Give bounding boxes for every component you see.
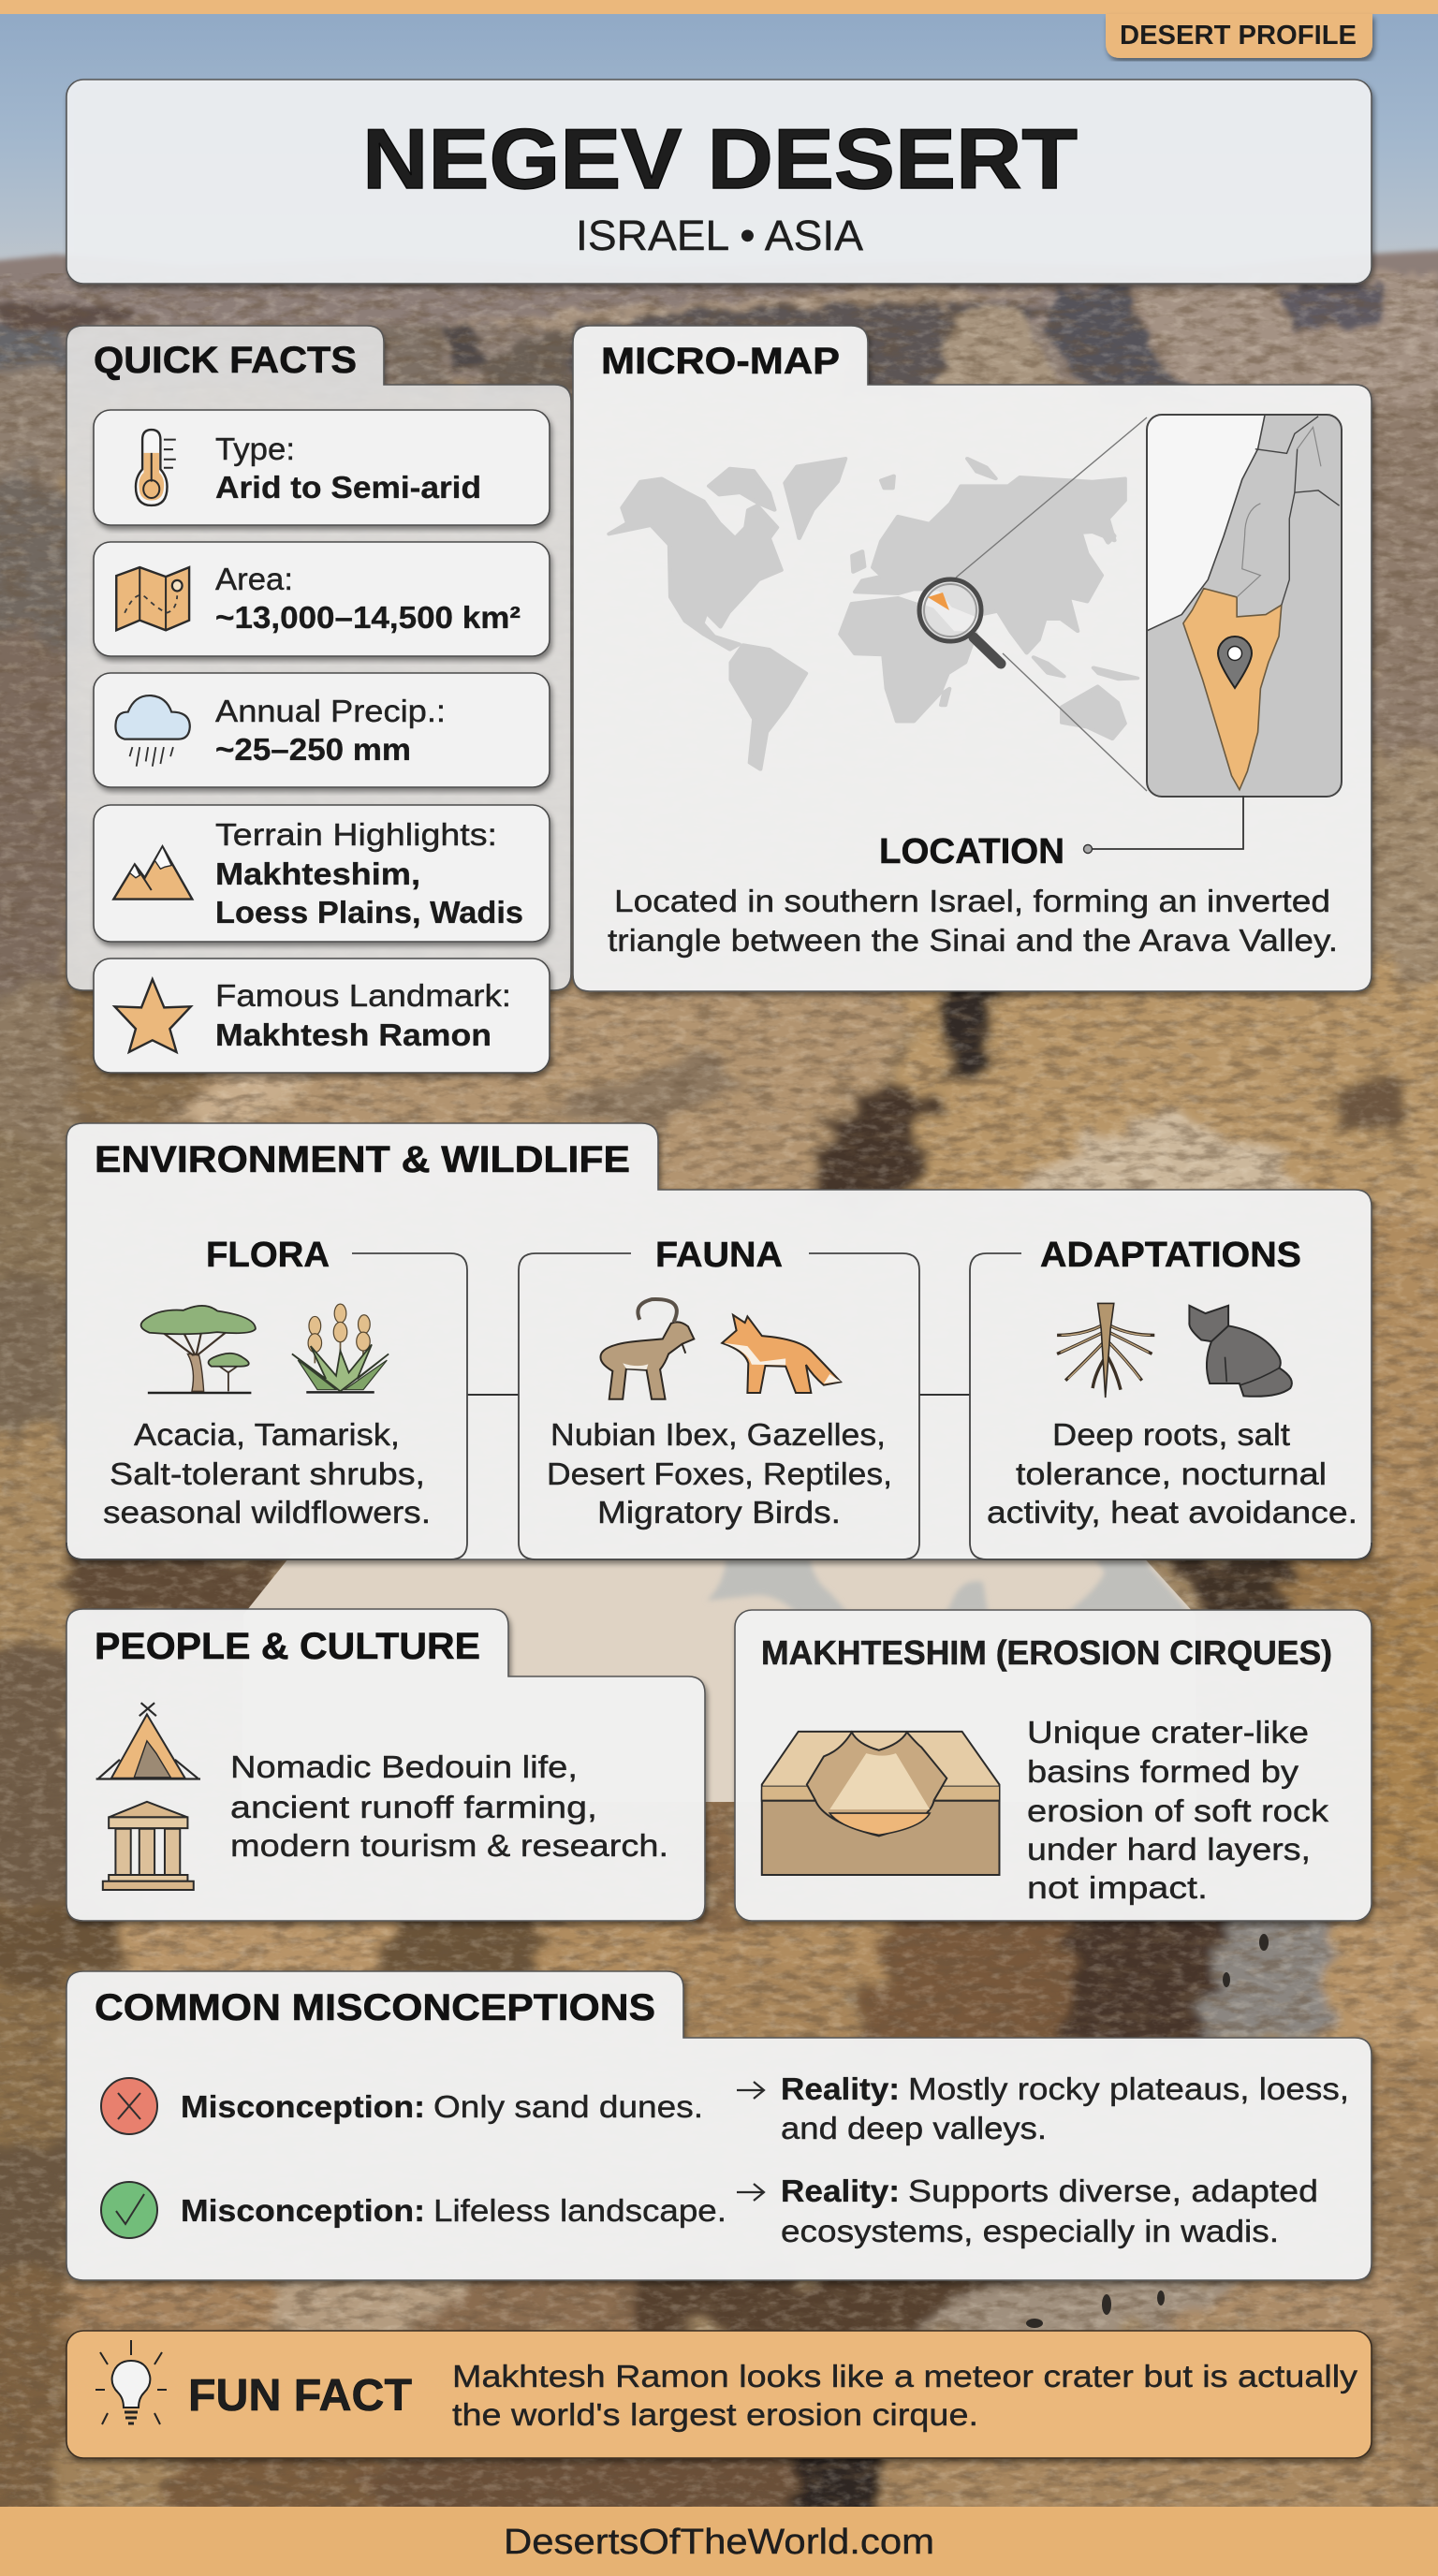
icon: desert fox <box>722 1315 841 1393</box>
fact: area: Area: <box>215 562 293 596</box>
heading: makhteshim: MAKHTESHIM (EROSION CIRQUES) <box>761 1633 1332 1672</box>
arrow one <box>737 2082 764 2099</box>
flora text: Salt-tolerant shrubs, <box>110 1456 425 1491</box>
fauna text <box>547 1417 892 1530</box>
heading: people and culture: PEOPLE & CULTURE <box>95 1626 480 1667</box>
flora text: seasonal wildflowers. <box>103 1495 431 1530</box>
heading: environment and wildlife: ENVIRONMENT & WILDLIFE <box>95 1139 630 1180</box>
icon: thermometer <box>136 430 176 505</box>
icon: magnifying glass <box>919 579 1001 664</box>
adaptations text: tolerance, nocturnal <box>1016 1456 1327 1491</box>
adaptations text <box>987 1417 1357 1530</box>
fact: famous landmark <box>94 959 550 1073</box>
fact: terrain highlights: Loess Plains, Wadis <box>215 895 523 929</box>
fun fact text: the world's largest erosion cirque. <box>452 2397 978 2432</box>
misconception two: Misconception: <box>181 2193 425 2228</box>
reality two: ecosystems, especially in wadis. <box>781 2214 1279 2248</box>
people text: ancient runoff farming, <box>230 1790 597 1824</box>
world map <box>609 459 1137 769</box>
icon: nubian ibex <box>600 1299 694 1399</box>
misconception one <box>181 2089 703 2124</box>
misconception two: Lifeless landscape. <box>433 2193 726 2228</box>
adaptations text: activity, heat avoidance. <box>987 1495 1357 1530</box>
fact: area <box>94 542 550 656</box>
connectors between cards <box>467 1394 970 1396</box>
fauna text: Desert Foxes, Reptiles, <box>547 1456 892 1491</box>
icon: mountains <box>113 846 192 900</box>
inset map: negev <box>1139 405 1342 797</box>
adaptations heading: ADAPTATIONS <box>1040 1236 1301 1275</box>
icon: deep roots <box>1057 1303 1154 1398</box>
icon: star <box>114 979 191 1052</box>
people text <box>230 1749 668 1863</box>
icon: green check <box>101 2182 157 2238</box>
adaptations text: Deep roots, salt <box>1052 1417 1290 1452</box>
reality one: Mostly rocky plateaus, loess, <box>908 2071 1349 2106</box>
heading: micro-map: MICRO-MAP <box>601 341 840 382</box>
icon: red cross <box>101 2078 157 2134</box>
flora heading: FLORA <box>206 1236 330 1275</box>
icon: nocturnal fox <box>1189 1306 1292 1397</box>
footer bar <box>0 2507 1438 2576</box>
fact: annual precipitation <box>94 673 550 787</box>
fun fact text: Makhtesh Ramon looks like a meteor crater but is actually <box>452 2359 1358 2393</box>
fun fact text <box>452 2359 1358 2432</box>
location description: triangle between the Sinai and the Arava Valley. <box>608 923 1338 958</box>
footer text: DesertsOfTheWorld.com <box>504 2523 934 2562</box>
icon: ancient temple <box>103 1802 194 1890</box>
icon: acacia trees <box>141 1306 256 1393</box>
fact: type: Type: <box>215 432 295 466</box>
location description <box>608 884 1338 958</box>
reality one: Reality: <box>781 2071 900 2106</box>
zoom connector lines <box>956 417 1147 791</box>
panel: environment and wildlife <box>66 1123 1372 1559</box>
icon: map <box>116 567 189 630</box>
people text: Nomadic Bedouin life, <box>230 1749 578 1784</box>
reality one: and deep valleys. <box>781 2111 1047 2145</box>
makhteshim text: basins formed by <box>1027 1754 1299 1789</box>
icon: light bulb <box>95 2340 167 2424</box>
makhteshim text: Unique crater-like <box>1027 1715 1309 1749</box>
fact: annual precipitation: ~25–250 mm <box>215 732 411 767</box>
fact: famous landmark: Makhtesh Ramon <box>215 1017 492 1052</box>
fact: area: ~13,000–14,500 km² <box>215 600 521 635</box>
fun fact label: FUN FACT <box>188 2371 412 2421</box>
flora text: Acacia, Tamarisk, <box>134 1417 400 1452</box>
tag: desert profile <box>1106 14 1372 58</box>
icon: bedouin tent <box>96 1703 200 1778</box>
icon: desert shrub <box>292 1304 389 1392</box>
reality one <box>781 2071 1349 2145</box>
heading: common misconceptions: COMMON MISCONCEPTIONS <box>95 1987 655 2028</box>
card: fauna <box>519 1236 919 1559</box>
panel: quick facts <box>66 326 571 1073</box>
fact: annual precipitation: Annual Precip.: <box>215 694 446 728</box>
fact: terrain highlights: Terrain Highlights: <box>215 817 497 852</box>
makhteshim text <box>1027 1715 1329 1905</box>
people text: modern tourism & research. <box>230 1828 668 1863</box>
misconception two <box>181 2193 726 2228</box>
fact: type <box>94 410 550 525</box>
flora text <box>103 1417 431 1530</box>
subtitle: ISRAEL • ASIA <box>576 212 863 259</box>
location description: Located in southern Israel, forming an inverted <box>614 884 1330 918</box>
misconception one: Misconception: <box>181 2089 425 2124</box>
heading: quick facts: QUICK FACTS <box>94 340 357 381</box>
panel: people and culture <box>66 1609 705 1921</box>
panel: common misconceptions <box>66 1971 1372 2280</box>
location label: LOCATION <box>879 832 1064 871</box>
tag: desert profile: DESERT PROFILE <box>1120 21 1357 51</box>
title panel <box>66 80 1372 284</box>
fauna heading: FAUNA <box>655 1236 783 1275</box>
card: adaptations <box>970 1236 1372 1559</box>
misconception one: Only sand dunes. <box>433 2089 703 2124</box>
makhteshim text: not impact. <box>1027 1870 1208 1905</box>
fact: terrain highlights: Makhteshim, <box>215 856 420 891</box>
diagram: erosion cirque block <box>762 1732 999 1875</box>
reality two: Reality: <box>781 2174 900 2208</box>
makhteshim text: under hard layers, <box>1027 1832 1311 1866</box>
panel: micro-map <box>573 326 1372 991</box>
top accent bar <box>0 0 1438 14</box>
fauna text: Migratory Birds. <box>597 1495 841 1530</box>
icon: rain cloud <box>115 695 190 767</box>
reality two: Supports diverse, adapted <box>908 2174 1318 2208</box>
panel: makhteshim <box>735 1610 1372 1921</box>
fauna text: Nubian Ibex, Gazelles, <box>550 1417 886 1452</box>
location callout line <box>1084 796 1243 854</box>
reality two <box>781 2174 1318 2248</box>
arrow two <box>737 2184 764 2201</box>
fact: famous landmark: Famous Landmark: <box>215 978 511 1013</box>
card: flora <box>66 1236 467 1559</box>
title: NEGEV DESERT <box>362 112 1078 207</box>
panel: fun fact <box>66 2331 1372 2458</box>
fact: type: Arid to Semi-arid <box>215 470 481 505</box>
makhteshim text: erosion of soft rock <box>1027 1793 1329 1828</box>
icon: location pin <box>1218 637 1252 688</box>
fact: terrain highlights <box>94 805 550 942</box>
